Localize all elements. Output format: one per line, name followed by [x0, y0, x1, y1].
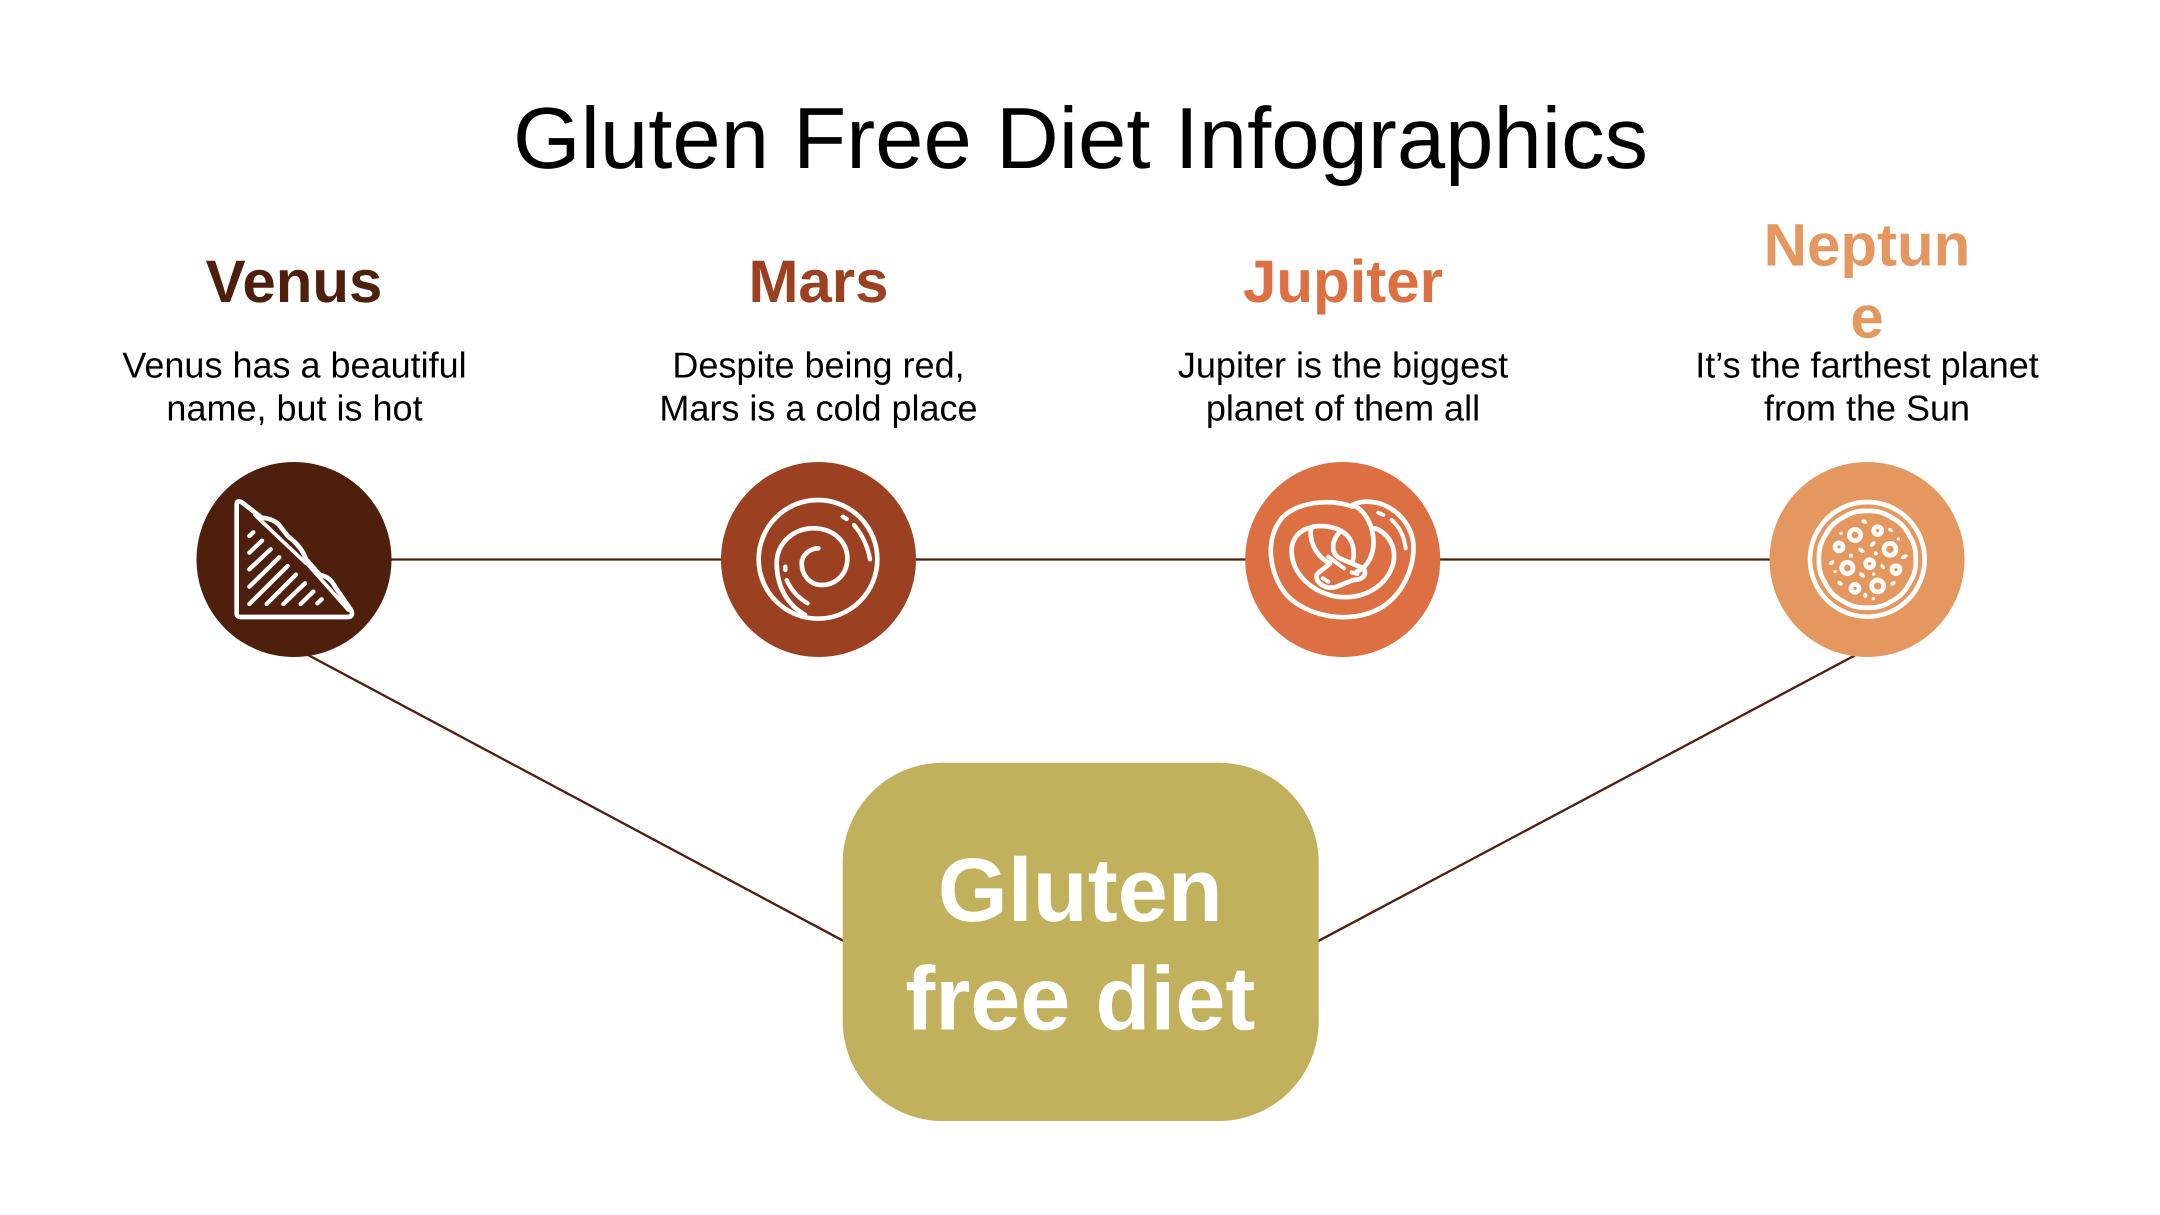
callout: Gluten free diet: Gluten: [938, 841, 1223, 941]
panel: Mars: [659, 248, 978, 657]
callout: Gluten free diet: free diet: [905, 949, 1255, 1049]
text: Mars description: Mars is a cold place: [659, 388, 978, 428]
text: Venus description: Venus has a beautiful: [122, 344, 467, 386]
text: Mars description: [659, 344, 978, 428]
heading: Neptune: e: [1850, 284, 1884, 350]
text: Jupiter description: planet of them all: [1206, 388, 1480, 428]
title: Gluten Free Diet Infographics: [513, 90, 1648, 187]
heading: Neptune: [1764, 212, 1970, 350]
callout: Gluten free diet: [843, 763, 1319, 1121]
icon: pretzel: [1245, 462, 1440, 657]
text: Neptune description: It’s the farthest planet: [1695, 344, 2039, 386]
text: Neptune description: from the Sun: [1764, 388, 1970, 428]
heading: Venus: Venus: [206, 248, 382, 315]
icon: cinnamon roll: [721, 462, 916, 657]
heading: Mars: Mars: [748, 248, 889, 315]
heading: Neptune: Neptun: [1764, 212, 1970, 278]
heading: Jupiter: Jupiter: [1243, 248, 1443, 315]
text: Mars description: Despite being red,: [672, 344, 965, 386]
connector lines: [294, 560, 1867, 941]
text: Jupiter description: Jupiter is the biggest: [1178, 344, 1508, 386]
panel: Venus: [122, 248, 467, 657]
panel: Jupiter: [1178, 248, 1508, 657]
text: Neptune description: [1695, 344, 2039, 428]
text: Venus description: name, but is hot: [166, 388, 423, 428]
text: Jupiter description: [1178, 344, 1508, 428]
text: Venus description: [122, 344, 467, 428]
panel: Neptune: [1695, 212, 2039, 657]
icon: pizza: [1770, 462, 1964, 657]
icon: sandwich: [196, 462, 392, 657]
